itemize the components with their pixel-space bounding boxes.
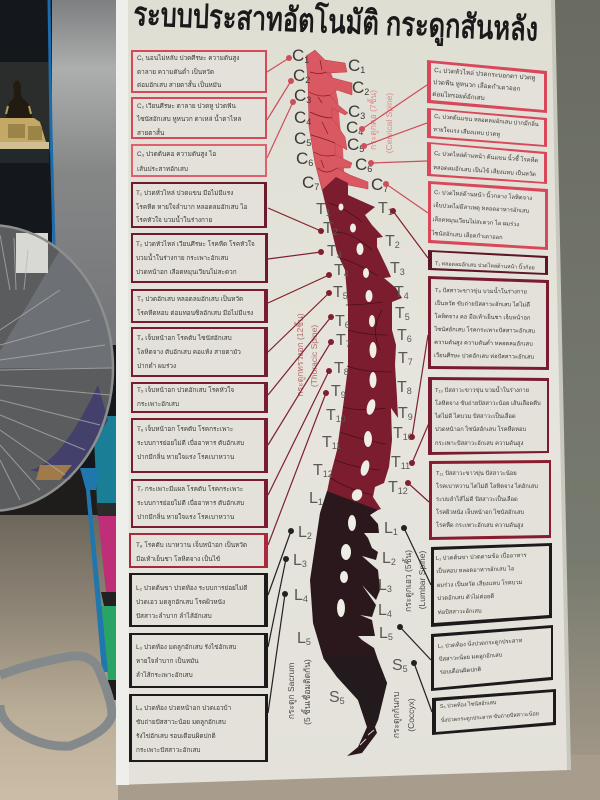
fan base xyxy=(0,656,112,746)
panel: right lumbar L1: ท่อปัสสาวะอักเสบ xyxy=(438,606,482,616)
panel: left thoracic T4: T₄ เจ็บหน้าอก โรคตับ ไซนัสอักเสบ xyxy=(137,333,232,342)
vertebra labels, left of spine: 5 xyxy=(340,696,345,706)
panel: left cervical C1: ต่อมอักเสบ สายตาสั้น เป็นหมัน xyxy=(137,80,222,89)
vertebra labels, right of spine: 5 xyxy=(405,312,410,322)
panel: right cervical C5 xyxy=(427,108,547,147)
panel: left thoracic T1: T₁ ปวดหัวไหล่ ปวดแขน มือไม่มีแรง xyxy=(136,189,233,197)
panel: left thoracic T2 xyxy=(131,233,268,283)
vertebra labels, left of spine: C xyxy=(292,46,304,65)
vertebra labels, right of spine: L xyxy=(382,550,391,567)
vertebra labels, right of spine: T xyxy=(393,425,403,442)
panel: right thoracic T11 xyxy=(429,460,551,540)
panel: right lumbar L5 xyxy=(431,625,553,691)
panel: left thoracic T3: โรคหืดหอบ ต่อมทอนซิลอักเสบ มือไม่มีแรง xyxy=(137,309,253,317)
panel: right thoracic T1 xyxy=(428,250,548,275)
vertebra labels, left of spine: 9 xyxy=(341,390,346,400)
panel: left thoracic T5: กระเพาะอักเสบ xyxy=(137,401,179,408)
panel: right cervical C7: ไซนัสอักเสบ เลือดกำเดาออก xyxy=(430,229,503,241)
panel: left thoracic T7 xyxy=(131,479,268,528)
cervical vertebrae xyxy=(306,50,368,190)
vertebra labels, left of spine: 5 xyxy=(306,138,311,148)
panel: right cervical C5: C₅ ปวดต้นแขน หลอดลมอักเสบ ปากมีกลิ่น xyxy=(434,112,539,128)
panel: left cervical C1: C₁ นอนไม่หลับ ปวดศีรษะ ความดันสูง xyxy=(137,54,239,62)
vertebra labels, right of spine: C xyxy=(355,155,367,174)
panel: right cervical C5: หายใจแรง เสียงแหบ ปวดหู xyxy=(433,125,501,138)
panel: left thoracic T8 xyxy=(129,533,268,568)
silver insulation panel with blue edge xyxy=(49,0,120,345)
panel: right thoracic T9: เป็นหวัด ขับถ่ายปัสสาวะอักเสบ ไตไม่ดี xyxy=(435,298,530,309)
panel: left cervical C1: ตาลาย ความดันต่ำ เป็นหวัด xyxy=(137,67,214,76)
panel: left thoracic T5: T₅ เจ็บหน้าอก ปวดอักเสบ โรคหัวใจ xyxy=(137,385,234,394)
vertical region labels: (Coccyx) xyxy=(406,698,416,732)
panel: left lumbar L2 xyxy=(129,573,268,627)
vertical region labels: (Lumbar Spine) xyxy=(417,551,427,609)
panel: right thoracic T10: กระเพาะปัสสาวะอักเสบ ความดันสูง xyxy=(435,439,524,447)
vertebra labels, right of spine: T xyxy=(394,284,404,301)
panel: left lumbar L4: รังไข่อักเสบ รอบเดือนผิดปกติ xyxy=(136,732,216,740)
vertebra labels, right of spine: T xyxy=(398,350,408,367)
panel: left thoracic T7: T₇ กระเพาะมีแผล โรคตับ โรคกระเพาะ xyxy=(137,485,243,493)
panel: right lumbar L1: ปวดอักเสบ ตัวไม่ค่อยดี xyxy=(437,592,494,602)
spine illustration xyxy=(306,50,402,756)
panel: left cervical C2: ไซนัสอักเสบ หูหนวก ตาเหล่ น้ำตาไหล xyxy=(136,114,241,123)
vertebra labels, left of spine: 3 xyxy=(337,250,342,260)
vertebra labels, left of spine: C xyxy=(302,173,314,192)
panel: right lumbar L5: ปัสสาวะน้อย มดลูกอักเสบ xyxy=(438,651,503,663)
panel: left thoracic T1: โรคหัวใจ บวมน้ำในร่างกาย xyxy=(136,215,212,224)
panel: right thoracic T11: โรคเบาหวาน ไตไม่ดี โลหิตจาง ไตอักเสบ xyxy=(436,482,538,490)
vertebra labels, left of spine: 7 xyxy=(314,182,319,192)
vertebra labels, right of spine: T xyxy=(385,233,395,250)
panel: right cervical C4: C₄ ปวดหัวไหล่ ปวดกระบอกตา ปวดหู xyxy=(434,66,536,82)
panel: right thoracic T9: เวียนศีรษะ ปวดอักเสบ ท่อปัสสาวะอักเสบ xyxy=(434,351,535,361)
vertebra labels, right of spine: 3 xyxy=(400,267,405,277)
vertebra labels, right of spine: 1 xyxy=(393,527,398,537)
vertebra labels, right of spine: T xyxy=(388,479,398,496)
vertebra labels, right of spine: 12 xyxy=(398,486,408,496)
vertebra labels, right of spine xyxy=(346,56,413,674)
panel: left thoracic T6 xyxy=(131,418,268,473)
lumbar and sacrum xyxy=(310,491,387,756)
vertical region labels: (Thoracic Spine) xyxy=(309,325,319,387)
vertebra labels, left of spine: T xyxy=(326,407,336,424)
vertebra labels, right of spine: 7 xyxy=(408,357,413,367)
vertebra labels, right of spine: 6 xyxy=(367,164,372,174)
vertebra labels, left of spine: 4 xyxy=(303,594,308,604)
panel: right cervical C7: C₇ ปวดไหล่ด้านหน้า นิ้วกลาง โลหิตจาง xyxy=(434,187,533,202)
panel: right cervical C6: หลอดลมอักเสบ เป็นไข้ เสียงแหบ เป็นหวัด xyxy=(433,162,536,178)
vertebra labels, left of spine: L xyxy=(309,490,318,507)
panel: right sacral S5: นั่งปวดกระดูกประสาท ขับถ่ายปัสสาวะน้อย xyxy=(441,709,539,724)
vertebra labels, right of spine: C xyxy=(346,118,358,137)
panel: left cervical C3: เส้นประสาทอักเสบ xyxy=(137,165,188,173)
panel: left lumbar L3: ลำไส้กระเพาะอักเสบ xyxy=(136,671,193,679)
vertebra labels, left of spine: T xyxy=(334,360,344,377)
panel: left lumbar L3: L₃ ปวดท้อง มดลูกอักเสบ รังไข่อักเสบ xyxy=(136,643,236,651)
vertebra labels, right of spine: T xyxy=(378,200,388,217)
vertebra labels, left of spine: C xyxy=(296,149,308,168)
vertebra labels, right of spine: L xyxy=(384,520,393,537)
vertebra labels, right of spine: 4 xyxy=(358,127,363,137)
vertebra labels, left of spine: T xyxy=(313,462,323,479)
panel: right cervical C7 xyxy=(428,181,548,250)
vertebra labels, right of spine: 5 xyxy=(359,144,364,154)
vertebra labels, right of spine: T xyxy=(395,305,405,322)
panel: left thoracic T4: โลหิตจาง ตับอักเสบ คอแห้ง สายตามัว xyxy=(137,348,241,356)
vertebra labels, left of spine: C xyxy=(294,129,306,148)
vertebra labels, right of spine: T xyxy=(398,405,408,422)
vertebra labels, right of spine: 4 xyxy=(404,291,409,301)
panel: right thoracic T9: โลหิตจาง คอ มือเท้าเย็นชา เจ็บหน้าอก xyxy=(435,311,531,322)
panel: right thoracic T9: T₉ ปัสสาวะขาวขุ่น บวมน้ำในร่างกาย xyxy=(435,285,527,296)
connector lines and dots: right side xyxy=(359,85,432,712)
vertical region labels: กระดูกคอ (7ชิ้น) xyxy=(367,90,379,150)
vertebra labels, left of spine: 2 xyxy=(305,75,310,85)
vertebra labels, right of spine: 2 xyxy=(391,557,396,567)
panel: right thoracic T9 xyxy=(428,276,549,370)
icon: golden buddha statue on shelf xyxy=(0,80,49,163)
panel: left lumbar L2: ปัสสาวะลำบาก ลำไส้อักเสบ xyxy=(136,612,212,620)
vertebra labels, right of spine: C xyxy=(371,175,383,194)
vertebra labels, right of spine: 6 xyxy=(407,334,412,344)
vertebra labels, right of spine: 7 xyxy=(383,184,388,194)
panel: left thoracic T8: T₈ โรคตับ เบาหวาน เจ็บหน้าอก เป็นหวัด xyxy=(136,540,247,549)
panel: left lumbar L4: กระเพาะปัสสาวะอักเสบ xyxy=(136,747,200,754)
vertebra labels, left of spine: S xyxy=(329,689,340,706)
panel: right thoracic T10: T₁₀ ปัสสาวะขาวขุ่น บวมน้ำในร่างกาย xyxy=(435,385,529,394)
vertebra labels, left of spine: 10 xyxy=(336,414,346,424)
vertical region labels: (Cervical Spine) xyxy=(384,93,394,153)
panel: left lumbar L4 xyxy=(129,694,268,762)
vertical region labels xyxy=(286,90,427,738)
panel: right thoracic T10: ปวดหน้าอก ไซนัสอักเสบ โรคหืดหอบ xyxy=(435,425,526,433)
panel: left thoracic T1 xyxy=(131,182,267,228)
panel: left cervical C1 xyxy=(131,50,267,93)
vertical region labels: กระดูกทรวงอก (12ชิ้น) xyxy=(294,313,306,397)
vertebra labels, left of spine: 2 xyxy=(307,531,312,541)
vertebra labels, left of spine: C xyxy=(294,86,306,105)
vertebra labels, left of spine: T xyxy=(334,262,344,279)
intervertebral foramina xyxy=(337,204,377,617)
vertebra labels, right of spine: 1 xyxy=(388,207,393,217)
panel: right cervical C4: ต่อมไทรอยด์อักเสบ xyxy=(432,90,485,102)
vertebra labels, left of spine: C xyxy=(294,108,306,127)
vertebra labels, left of spine: 3 xyxy=(306,95,311,105)
panel: right lumbar L5: รอบเดือนผิดปกติ xyxy=(439,665,482,676)
panel: left lumbar L2: ปวดเอว มดลูกอักเสบ โรคผิวหนัง xyxy=(136,598,225,606)
vertebra labels, left of spine: 6 xyxy=(345,320,350,330)
poster board xyxy=(116,0,571,785)
connector lines and dots: left side xyxy=(267,55,334,713)
vertebra labels, right of spine: 5 xyxy=(388,632,393,642)
vertebra labels, right of spine: L xyxy=(378,602,387,619)
vertebra labels, right of spine: T xyxy=(391,454,401,471)
panel: left thoracic T3: T₃ ปวดอักเสบ หลอดลมอักเสบ เป็นหวัด xyxy=(137,294,243,303)
panel: left thoracic T6: ระบบการย่อยไม่ดี เบื่ออาหาร ตับอักเสบ xyxy=(137,438,244,447)
vertebra labels, left of spine: 12 xyxy=(323,469,333,479)
panel: left thoracic T6: T₆ เจ็บหน้าอก โรคตับ โรคกระเพาะ xyxy=(137,424,233,433)
panel: right cervical C7: เจ็บปวดไม่มีสาเหตุ หลอดอาหารอักเสบ xyxy=(433,200,530,215)
vertebra labels, right of spine: 8 xyxy=(407,386,412,396)
vertebra labels, right of spine: 3 xyxy=(387,584,392,594)
vertebra labels, right of spine: C xyxy=(348,102,360,121)
panel: left lumbar L4: ขับถ่ายปัสสาวะน้อย มดลูกอักเสบ xyxy=(136,718,226,726)
panel: right thoracic T9: ไซนัสอักเสบ โรคกระเพาะปัสสาวะอักเสบ xyxy=(433,325,535,335)
vertebra labels, right of spine: 2 xyxy=(395,240,400,250)
vertebra labels, left of spine: T xyxy=(336,332,346,349)
vertebra labels, right of spine: 1 xyxy=(360,65,365,75)
vertical region labels: กระดูก Sacrum xyxy=(286,663,297,719)
vertebra labels, left of spine: 6 xyxy=(308,158,313,168)
vertebra labels, right of spine: 9 xyxy=(408,412,413,422)
vertebra labels, left of spine: 1 xyxy=(318,497,323,507)
vertebra labels, right of spine: T xyxy=(397,327,407,344)
vertebra labels, left of spine: L xyxy=(297,630,306,647)
panel: right lumbar L1: เป็นหอบ หลอดอาหารอักเสบ ไอ xyxy=(436,563,514,575)
vertebra labels, right of spine: C xyxy=(352,78,364,97)
panel: left thoracic T4: ปากดำ ผมร่วง xyxy=(137,363,176,370)
panel: left thoracic T3 xyxy=(131,289,268,323)
panel: left thoracic T2: บวมน้ำในร่างกาย กระเพาะอักเสบ xyxy=(136,253,228,262)
panel: left thoracic T6: ปากมีกลิ่น หายใจแรง โรคเบาหวาน xyxy=(137,452,235,461)
vertebra labels, left of spine xyxy=(292,46,351,706)
vertebra labels, right of spine: L xyxy=(379,625,388,642)
vertebra labels, left of spine: 1 xyxy=(326,208,331,218)
vertebra labels, left of spine: 8 xyxy=(344,367,349,377)
panel: left thoracic T2: ปวดหน้าอก เลือดหมุนเวียนไม่สะดวก xyxy=(136,268,237,276)
vertebra labels, left of spine: 5 xyxy=(306,637,311,647)
panel: right lumbar L1 xyxy=(431,543,552,627)
thoracic vertebrae xyxy=(322,177,402,511)
panel: left thoracic T7: ปากมีกลิ่น หายใจแรง โรคเบาหวาน xyxy=(137,512,235,521)
panel: right thoracic T11: โรคหืด กระเพาะอักเสบ ความดันสูง xyxy=(436,521,523,529)
vertebra labels, left of spine: 4 xyxy=(306,117,311,127)
vertebra labels, right of spine: C xyxy=(347,135,359,154)
vertical region labels: กระดูกเอว (5ชิ้น) xyxy=(402,550,414,612)
vertebra labels, left of spine: T xyxy=(331,383,341,400)
buckets and fan neck xyxy=(80,416,118,700)
vertebra labels, right of spine: T xyxy=(390,260,400,277)
panel: right thoracic T11: T₁₁ ปัสสาวะขาวขุ่น ปัสสาวะน้อย xyxy=(436,469,517,477)
panel: left cervical C2: สายตาสั้น xyxy=(137,128,165,137)
panel: left thoracic T8: มือเท้าเย็นชา โลหิตจาง เป็นไข้ xyxy=(136,554,220,563)
panel: left thoracic T1: โรคหืด หายใจลำบาก หลอดลมอักเสบ ไอ xyxy=(136,203,248,211)
vertebra labels, left of spine: T xyxy=(327,243,337,260)
vertebra labels, left of spine: 1 xyxy=(304,55,309,65)
vertebra labels, left of spine: T xyxy=(333,284,343,301)
panel: right lumbar L1: ผมร่วง เป็นหวัด เสียงแหบ โรคบวม xyxy=(437,577,523,589)
panel: right thoracic T11: โรคผิวหนัง เจ็บหน้าอก ไซนัสอักเสบ xyxy=(436,507,525,516)
panel: right lumbar L1: L₁ ปวดต้นขา ปวดตามข้อ เบื่ออาหาร xyxy=(436,551,527,562)
vertebra labels, right of spine: C xyxy=(348,56,360,75)
panel: left thoracic T5 xyxy=(131,382,268,413)
panel: right thoracic T10 xyxy=(428,377,549,455)
vertebra labels, left of spine: L xyxy=(294,587,303,604)
fan xyxy=(0,225,113,511)
vertebra labels, left of spine: 11 xyxy=(332,441,341,451)
panel: right cervical C7: เลือดหมุนเวียนไม่สะดวก ไอ ผมร่วง xyxy=(432,215,520,228)
vertebra labels, left of spine: 4 xyxy=(344,269,349,279)
vertebra labels, right of spine: 5 xyxy=(403,664,408,674)
vertebra labels, left of spine: L xyxy=(293,552,302,569)
panel: right cervical C6: C₆ ปวดไหล่ด้านหน้า ต้นแขน นิ้วชี้ โรคหืด xyxy=(434,148,539,164)
vertebra labels, left of spine: T xyxy=(323,220,333,237)
panel: right sacral S5: S₅ ปวดท้อง ไซนัสอักเสบ xyxy=(440,699,497,710)
panel: right cervical C6 xyxy=(427,142,547,184)
vertebra labels, right of spine: 11 xyxy=(401,461,410,471)
vertebra labels, right of spine: 2 xyxy=(364,87,369,97)
vertebra labels, right of spine: 3 xyxy=(360,111,365,121)
vertebra labels, right of spine: 4 xyxy=(387,609,392,619)
panel: right cervical C4: ปวดฟัน หูหนวก เลือดกำเดาออก xyxy=(433,78,521,93)
vertebra labels, left of spine: 5 xyxy=(343,291,348,301)
vertebra labels, left of spine: C xyxy=(293,66,305,85)
panel: left thoracic T7: ระบบการย่อยไม่ดี เบื่ออาหาร ตับอักเสบ xyxy=(137,498,244,507)
panel: right cervical C4 xyxy=(427,60,547,113)
vertebra labels, right of spine: S xyxy=(392,657,403,674)
panel: left cervical C3 xyxy=(131,144,267,177)
vertebra labels, left of spine: 3 xyxy=(302,559,307,569)
vertebra labels, right of spine: T xyxy=(397,379,407,396)
vertebra labels, left of spine: L xyxy=(298,524,307,541)
panel: left cervical C3: C₃ ปวดต้นคอ ความดันสูง ไอ xyxy=(137,150,216,158)
panel: right thoracic T1: T₁ หลอดลมอักเสบ ปวดไหล่ด้านหน้า นิ้วก้อย xyxy=(435,259,535,271)
panel: right thoracic T11: ระบบลำไส้ไม่ดี ปัสสาวะเป็นเลือด xyxy=(436,494,518,503)
panel: right sacral S5 xyxy=(432,689,556,735)
panel: left lumbar L3: หายใจลำบาก เป็นหมัน xyxy=(136,656,199,665)
vertebra labels, right of spine: 10 xyxy=(403,432,413,442)
panel: left lumbar L3 xyxy=(129,633,268,688)
panel: right lumbar L5: L₅ ปวดท้อง นั่งปวดกระดูกประสาท xyxy=(438,636,523,650)
panel: left cervical C2 xyxy=(131,97,267,139)
vertebra labels, left of spine: 2 xyxy=(333,227,338,237)
panel: left lumbar L4: L₄ ปวดท้อง ปวดหน้าอก ปวดเอวบ้า xyxy=(136,704,231,712)
vertebra labels, left of spine: T xyxy=(316,201,326,218)
panel: left thoracic T4 xyxy=(131,327,268,377)
panel: right thoracic T10: ไตไม่ดี ไตบวม ปัสสาวะเป็นเลือด xyxy=(434,411,516,420)
vertical region labels: (5 ชิ้นเชื่อมติดกัน) xyxy=(301,659,312,725)
vertical region labels: กระดูกก้นกบ xyxy=(391,692,402,738)
panel: left cervical C2: C₂ เวียนศีรษะ ตาลาย ปวดหู ปวดฟัน xyxy=(137,102,237,110)
vertebra labels, left of spine: T xyxy=(322,434,332,451)
vertebra labels, right of spine: L xyxy=(378,577,387,594)
panel: right thoracic T10: โลหิตจาง ขับถ่ายปัสสาวะน้อย เส้นเลือดตีบ xyxy=(435,399,541,407)
vertebra labels, left of spine: T xyxy=(335,313,345,330)
panel: left lumbar L2: L₂ ปวดต้นขา ปวดท้อง ระบบการย่อยไม่ดี xyxy=(136,584,247,592)
panel: right thoracic T9: ความดันสูง ความดันต่ำ หลอดลมอักเสบ xyxy=(434,338,533,348)
vertebra labels, left of spine: 7 xyxy=(346,339,351,349)
panel: left thoracic T2: T₂ ปวดหัวไหล่ เวียนศีรษะ โรคหืด โรคหัวใจ xyxy=(136,240,255,248)
